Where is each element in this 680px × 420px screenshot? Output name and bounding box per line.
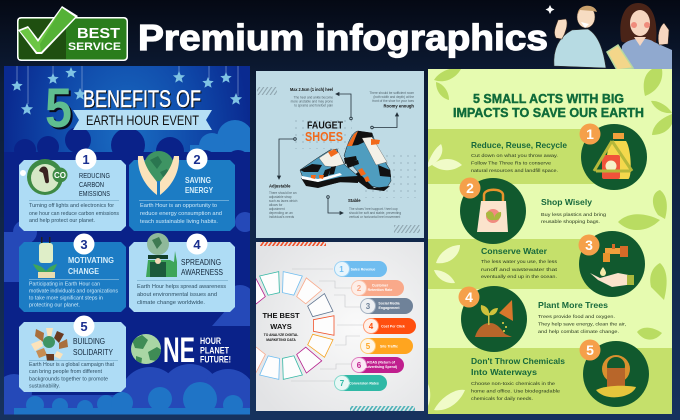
step text: Cut down on what you throw away. xyxy=(471,153,558,159)
step text xyxy=(471,356,565,402)
card text: can bring people from different xyxy=(29,369,103,375)
callout: stable: The shoes' heel support / heel cup xyxy=(349,207,398,211)
card text: backgrounds together to promote xyxy=(29,376,108,382)
card heading xyxy=(73,338,113,355)
pill 6: roas: 6 xyxy=(357,361,362,370)
callout: adjustable: allows for xyxy=(269,203,283,207)
panel: fauget shoes xyxy=(256,71,424,238)
badge 5 xyxy=(580,340,600,360)
badge 2 xyxy=(460,178,480,198)
card text: Earth Hour is a global campaign that xyxy=(29,362,115,368)
step text: Don't Throw Chemicals xyxy=(471,356,565,366)
callout: roomy enough xyxy=(369,91,414,108)
card 5: building solidarity xyxy=(19,316,126,392)
card text xyxy=(29,362,115,390)
icon: sparkle xyxy=(546,5,554,14)
icon: people and globe xyxy=(146,233,177,277)
pill 3: social media engagement: Engagement xyxy=(378,306,400,310)
icon: pipe pouring chemicals xyxy=(596,355,636,397)
pill 1: sales revenue: 1 xyxy=(339,265,344,274)
callout: adjustable: individual's needs xyxy=(269,215,294,219)
heading: 5 xyxy=(47,78,74,141)
callout: adjustable: Adjustable xyxy=(269,184,291,188)
step text: Shop Wisely xyxy=(541,197,592,207)
card heading: REDUCING xyxy=(79,173,110,180)
callout: adjustable: adjustable strap xyxy=(269,195,292,199)
title: IMPACTS TO SAVE OUR EARTH xyxy=(453,105,644,120)
illustration: pair of shoes xyxy=(300,131,391,191)
pill 1: sales revenue: Sales Revenue xyxy=(351,268,375,272)
card text xyxy=(140,203,222,225)
badge 3: 3 xyxy=(585,237,593,253)
step 2: shop wisely xyxy=(460,178,606,244)
heading: 5 xyxy=(45,76,72,139)
step text: Conserve Water xyxy=(481,246,548,256)
icon: tote bag xyxy=(477,190,508,232)
card text xyxy=(29,203,120,224)
clouds xyxy=(0,120,256,420)
card heading xyxy=(68,257,114,274)
number 2: 2 xyxy=(193,152,201,167)
illustration: woman with folder xyxy=(607,3,672,70)
callout: heel height: to sprains and forefoot pain xyxy=(294,104,333,108)
panel: five small acts xyxy=(428,68,672,414)
chart: segmented wheel xyxy=(256,271,334,380)
badge 4 xyxy=(458,286,480,308)
shoes title xyxy=(305,120,343,144)
pill 7: conversion rates xyxy=(334,375,387,391)
step text xyxy=(541,197,606,225)
card 1: reducing carbon emissions xyxy=(19,148,126,231)
card 2: saving energy xyxy=(129,148,235,231)
icon: plug and plant xyxy=(33,237,57,278)
callout: adjustable: There should be an xyxy=(269,191,297,195)
card text: protecting our planet. xyxy=(29,302,80,308)
step text: natural resources and landfill space. xyxy=(471,168,558,174)
step text: Trees provide food and oxygen. xyxy=(538,314,615,320)
callout: heel height: The heel and ankle become xyxy=(294,96,333,100)
callout: stable: should be soft and stable, preventing xyxy=(349,211,401,215)
step text: home and office. Use biodegradable xyxy=(471,388,560,394)
pill 3: social media engagement xyxy=(360,298,413,314)
step text: Buy less plastics and bring xyxy=(541,212,606,218)
panel: digital marketing wheel xyxy=(256,242,424,411)
icon: best service badge: SERVICE xyxy=(68,41,121,53)
callout: stable: vertical or horizontal heel movement xyxy=(349,215,400,219)
card text: one hour can reduce carbon emissions xyxy=(29,211,120,217)
pill 4: cost per click xyxy=(364,318,416,334)
card 4: spreading awareness xyxy=(129,233,235,312)
heading: BENEFITS OF xyxy=(83,86,201,113)
pill 3: social media engagement: 3 xyxy=(366,302,371,311)
pill 2: customer retention rate: Retention Rate xyxy=(368,288,392,292)
callout: stable: Stable xyxy=(348,198,361,203)
callout: heel height: Max 2.5cm (1 inch) heel xyxy=(290,87,333,92)
step text: They help save energy, clean the air, xyxy=(538,322,626,328)
callout: adjustable: depending on an xyxy=(269,211,293,215)
card text: to take more significant steps in xyxy=(29,296,103,302)
title: Premium infographics xyxy=(138,17,548,58)
slogan: one hour planet future: FUTURE! xyxy=(200,354,231,366)
number 3: 3 xyxy=(80,237,88,252)
icon: bottle and can xyxy=(594,133,632,179)
card heading xyxy=(181,259,223,275)
callout: heel height: more unstable and may prone xyxy=(291,100,333,104)
callout: adjustable: adjustment xyxy=(269,207,285,211)
card heading: SAVING xyxy=(185,175,211,185)
slogan: one hour planet future: HOUR xyxy=(200,336,221,347)
bands xyxy=(428,129,672,414)
card heading xyxy=(79,173,110,198)
pill 5: site traffic xyxy=(360,338,413,354)
step text: Reduce, Reuse, Recycle xyxy=(471,140,567,150)
decorative leaves xyxy=(428,68,672,410)
heading: BENEFITS OF xyxy=(84,87,202,114)
step text: Plant More Trees xyxy=(538,300,608,310)
card heading: CHANGE xyxy=(68,266,99,276)
card text: climate change worldwide. xyxy=(137,300,205,306)
header banner xyxy=(17,3,672,70)
wheel title: THE BEST xyxy=(262,311,300,320)
step 5: don't throw chemicals xyxy=(471,340,649,407)
card text: Participating in Earth Hour can xyxy=(29,282,100,288)
card 3: motivating change xyxy=(19,234,126,312)
card text: Turning off lights and electronics for xyxy=(29,203,114,209)
title xyxy=(454,94,644,118)
icon: tap and hand xyxy=(590,244,634,287)
wheel title: MARKETING DATA xyxy=(266,338,296,342)
badge 3 xyxy=(578,234,600,256)
slogan: one hour planet future: PLANET xyxy=(200,346,229,356)
badge 5: 5 xyxy=(586,342,594,358)
number 5: 5 xyxy=(80,319,88,334)
step text: Into Waterways xyxy=(471,367,537,377)
badge 1 xyxy=(580,124,600,144)
heading xyxy=(46,88,212,130)
step 4: plant more trees xyxy=(458,286,626,352)
wheel title: WAYS xyxy=(270,322,292,331)
step 3: conserve water xyxy=(481,231,645,297)
pill 2: customer retention rate xyxy=(352,280,404,296)
card heading: AWARENESS xyxy=(181,268,223,277)
step text xyxy=(538,300,626,335)
pill 6: roas xyxy=(352,357,404,373)
wheel title: TO ANALYZE DIGITAL xyxy=(264,333,298,337)
card text: Earth Hour helps spread awareness xyxy=(137,284,227,290)
icon: best service badge: BEST xyxy=(77,25,120,42)
callout: roomy enough: There should be sufficient room xyxy=(369,91,414,95)
card text: sustainability. xyxy=(29,384,60,390)
pill 6: roas: ROAS (Return of xyxy=(367,360,396,364)
pill 7: conversion rates: Conversion Rates xyxy=(349,382,379,386)
badge 4: 4 xyxy=(465,289,473,305)
step text: Follow The Three Rs to conserve xyxy=(471,160,551,166)
pill 2: customer retention rate: Customer xyxy=(372,284,389,288)
pill 4: cost per click: Cost Per Click xyxy=(381,324,405,328)
badge 2: 2 xyxy=(466,180,474,196)
badge 1: 1 xyxy=(586,126,594,142)
slogan: one hour planet future: NE xyxy=(163,331,195,370)
number 4: 4 xyxy=(193,237,201,252)
step text: chemicals for daily needs. xyxy=(471,396,533,402)
number 1: 1 xyxy=(82,152,90,167)
shoes title: SHOES xyxy=(305,129,343,144)
card heading: MOTIVATING xyxy=(68,255,114,265)
pill 2: customer retention rate: 2 xyxy=(357,284,362,293)
slogan: one hour planet future xyxy=(131,334,230,364)
callout: stable xyxy=(348,198,401,219)
illustration: man giving ok sign xyxy=(554,6,606,68)
callout: adjustable: such as laces which xyxy=(269,199,298,203)
step text: and help combat climate change. xyxy=(538,329,619,335)
card text: and help protect our planet. xyxy=(29,218,95,224)
wheel title xyxy=(262,311,300,342)
card heading: BUILDING xyxy=(73,337,105,346)
step text: runoff and wastewater that xyxy=(481,267,558,273)
pill 4: cost per click: 4 xyxy=(369,322,374,331)
card text xyxy=(29,282,119,308)
step text: reusable shopping bags. xyxy=(541,219,600,225)
step text: The less water you use, the less xyxy=(481,259,558,265)
title: 5 SMALL ACTS WITH BIG xyxy=(473,91,624,106)
card heading: ENERGY xyxy=(185,185,213,195)
step 1: reduce reuse recycle xyxy=(471,124,647,190)
card heading: SOLIDARITY xyxy=(73,348,114,357)
icon: hands around globe xyxy=(31,328,68,361)
pill 7: conversion rates: 7 xyxy=(340,379,345,388)
callout: adjustable xyxy=(269,184,298,219)
pill 5: site traffic: 5 xyxy=(366,342,371,351)
card heading xyxy=(185,177,213,193)
card heading: EMISSIONS xyxy=(79,191,110,198)
pill 6: roas: Advertising Spend) xyxy=(365,365,397,369)
pill 1: sales revenue xyxy=(334,261,387,277)
icon: best service badge xyxy=(17,6,128,61)
step text: Choose non-toxic chemicals in the xyxy=(471,381,555,387)
leader lines xyxy=(291,269,363,381)
card text xyxy=(137,284,227,306)
step text xyxy=(471,140,567,174)
step text xyxy=(481,246,558,280)
hanging stars xyxy=(11,66,242,115)
callout: roomy enough: Roomy enough xyxy=(384,104,414,108)
card text: motivate individuals and organizations xyxy=(29,288,119,294)
icon: carbon footprint: CO xyxy=(54,171,66,180)
heading: EARTH HOUR EVENT xyxy=(86,112,199,128)
panel: earth hour benefits xyxy=(0,66,256,420)
callout: roomy enough: (both width and depth) at the xyxy=(373,95,414,99)
card text: teach sustainable living habits. xyxy=(140,219,218,225)
shoes title: FAUGET xyxy=(307,120,343,132)
card heading: SPREADING xyxy=(181,258,221,267)
card text: about environmental issues and xyxy=(137,292,217,298)
card text: reduce energy consumption and xyxy=(140,211,222,217)
card text: Earth Hour is an opportunity to xyxy=(140,203,217,209)
icon: seedling and soil xyxy=(475,300,513,337)
pill 3: social media engagement: Social Media xyxy=(378,302,400,306)
callout: heel height xyxy=(290,87,333,108)
callout: roomy enough: front of the shoe for your toes xyxy=(372,99,414,103)
step text: eventually end up in the ocean. xyxy=(481,274,557,280)
pill 5: site traffic: Site Traffic xyxy=(380,344,398,348)
icon: hands holding globe xyxy=(138,151,179,195)
card heading: CARBON xyxy=(79,182,104,189)
connector arrows xyxy=(278,92,398,214)
